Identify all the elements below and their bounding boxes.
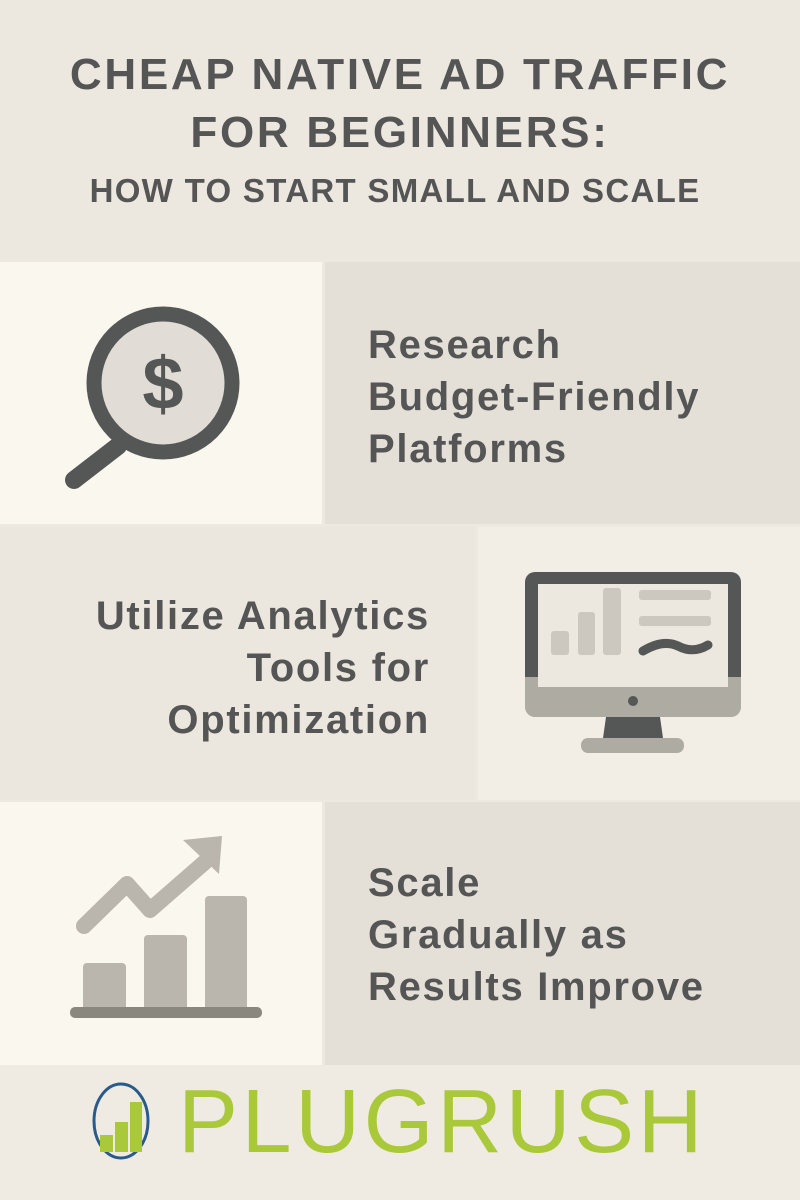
- panel: row2 icon: [478, 527, 800, 800]
- icon: magnifier with dollar: [65, 306, 240, 489]
- title: [70, 50, 730, 209]
- icon: magnifier with dollar: $: [142, 342, 184, 425]
- logo: plugrush: PLUGRUSH: [178, 1072, 706, 1172]
- title: CHEAP NATIVE AD TRAFFIC: [70, 50, 730, 99]
- panel: row1 text: [325, 262, 800, 524]
- panel: row3 text: [325, 802, 800, 1065]
- footer background: [0, 1065, 800, 1200]
- panel: row2 text: [0, 527, 475, 800]
- title: HOW TO START SMALL AND SCALE: [90, 172, 700, 209]
- panel: row1 text: Research: [368, 323, 562, 367]
- panel: row2 text: Tools for: [247, 646, 430, 690]
- panel: row3 icon: [0, 802, 322, 1065]
- panel: row3 text: Results Improve: [368, 965, 705, 1009]
- icon: growth chart: [70, 836, 262, 1018]
- panel: row1 text: Budget-Friendly: [368, 375, 700, 419]
- panel: row3 text: Gradually as: [368, 913, 629, 957]
- panel: row1 text: Platforms: [368, 427, 568, 471]
- panel: row1 icon: [0, 262, 322, 524]
- title: FOR BEGINNERS:: [190, 108, 610, 157]
- icon: logo circle with bars: [92, 1082, 150, 1160]
- icon: monitor with analytics: [525, 572, 741, 753]
- panel: row3 text: Scale: [368, 861, 481, 905]
- panel: row2 text: Optimization: [167, 698, 430, 742]
- panel: row2 text: Utilize Analytics: [96, 594, 430, 638]
- header background: [0, 0, 800, 260]
